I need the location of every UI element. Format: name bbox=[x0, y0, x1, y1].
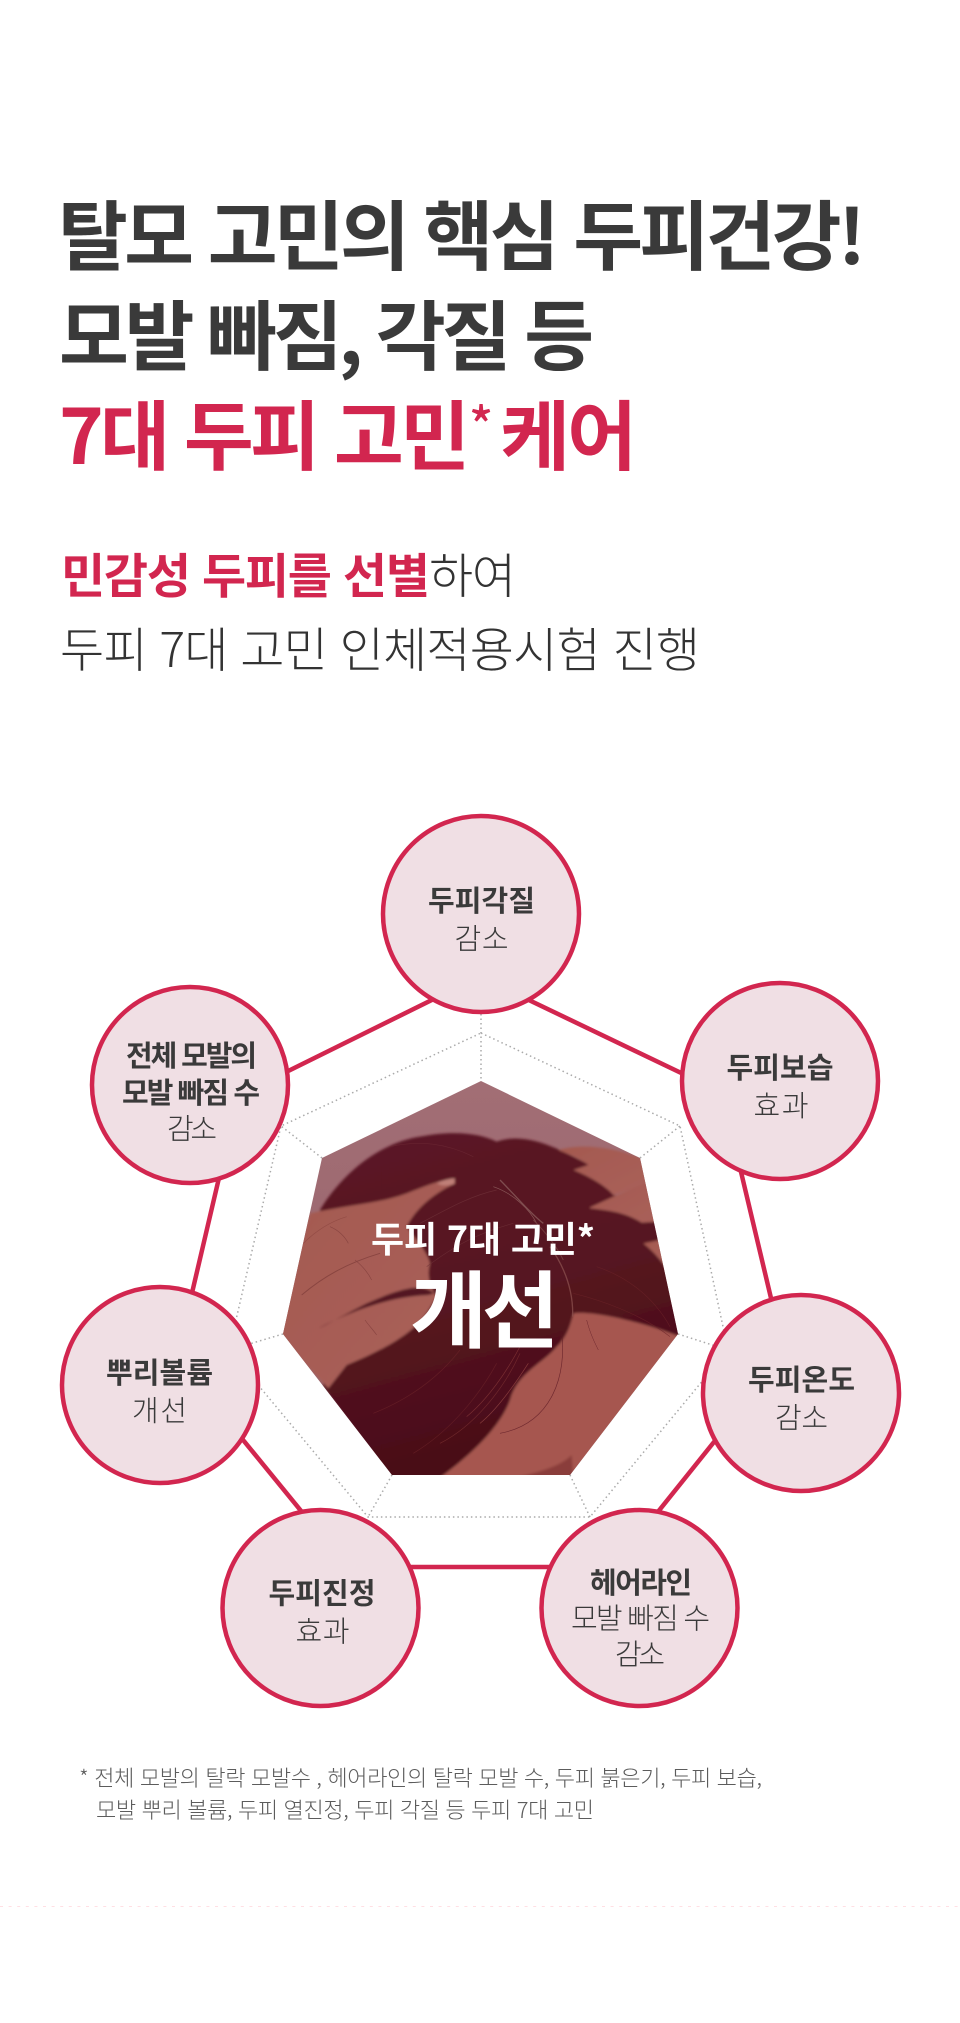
footnote line 1: * 전체 모발의 탈락 모발수 , 헤어라인의 탈락 모발 수, 두피 붉은기, 두피 보습, bbox=[79, 1761, 762, 1793]
circle: 두피보습 효과: 효과 bbox=[754, 1083, 808, 1125]
circle: 헤어라인 모발 빠짐 수 감소: 감소 bbox=[615, 1632, 665, 1674]
subtitle bbox=[60, 537, 700, 681]
circle: 헤어라인 모발 빠짐 수 감소: 모발 빠짐 수 bbox=[571, 1596, 710, 1638]
circle: 두피각질 감소: 두피각질 bbox=[428, 878, 535, 920]
circle: 전체 모발의 모발 빠짐 수 감소 bbox=[92, 987, 288, 1183]
center heptagon photo of scalp bbox=[277, 1080, 700, 1480]
circle: 뿌리볼륨 개선: 뿌리볼륨 bbox=[106, 1350, 213, 1392]
footnote line 2: 모발 뿌리 볼륨, 두피 열진정, 두피 각질 등 두피 7대 고민 bbox=[96, 1793, 594, 1825]
circle: 전체 모발의 모발 빠짐 수 감소: 모발 빠짐 수 bbox=[122, 1070, 260, 1112]
title bbox=[58, 176, 866, 486]
circle: 두피진정 효과: 효과 bbox=[296, 1608, 350, 1650]
circle: 두피온도 감소 bbox=[703, 1295, 899, 1491]
subtitle line 1: 민감성 두피를 선별 bbox=[61, 537, 430, 607]
title line 3 red: * bbox=[469, 387, 493, 459]
red connector lines bbox=[188, 991, 775, 1567]
circle: 두피각질 감소: 감소 bbox=[454, 916, 508, 958]
title line 2: 모발 빠짐, 각질 등 bbox=[59, 276, 594, 386]
circle: 두피온도 감소: 두피온도 bbox=[748, 1357, 855, 1399]
circle: 헤어라인 모발 빠짐 수 감소: 헤어라인 bbox=[590, 1560, 692, 1602]
center label small: 두피 7대 고민* bbox=[371, 1211, 595, 1263]
center label bbox=[371, 1211, 595, 1366]
circle: 두피보습 효과 bbox=[682, 983, 878, 1179]
circle: 두피진정 효과 bbox=[222, 1510, 418, 1706]
dotted radar guide bbox=[229, 1014, 728, 1517]
title line 3 red: 케어 bbox=[500, 376, 637, 486]
circle: 전체 모발의 모발 빠짐 수 감소: 감소 bbox=[167, 1106, 217, 1148]
circle: 헤어라인 모발 빠짐 수 감소 bbox=[542, 1510, 738, 1706]
subtitle line 2: 두피 7대 고민 인체적용시험 진행 bbox=[60, 611, 700, 681]
circle: 두피각질 감소 bbox=[383, 816, 579, 1012]
title line 1: 탈모 고민의 핵심 두피건강! bbox=[58, 176, 866, 286]
subtitle line 1: 하여 bbox=[429, 537, 516, 607]
center label large: 개선 bbox=[410, 1245, 559, 1366]
circle: 전체 모발의 모발 빠짐 수 감소: 전체 모발의 bbox=[126, 1033, 257, 1075]
circle: 두피보습 효과: 두피보습 bbox=[726, 1045, 834, 1087]
circle: 두피온도 감소: 감소 bbox=[775, 1395, 828, 1437]
title line 3 red: 7대 두피 고민 bbox=[59, 376, 470, 486]
footnote bbox=[79, 1761, 762, 1825]
circle: 뿌리볼륨 개선 bbox=[62, 1287, 258, 1483]
circle: 뿌리볼륨 개선: 개선 bbox=[132, 1388, 187, 1430]
circle: 두피진정 효과: 두피진정 bbox=[268, 1570, 376, 1612]
